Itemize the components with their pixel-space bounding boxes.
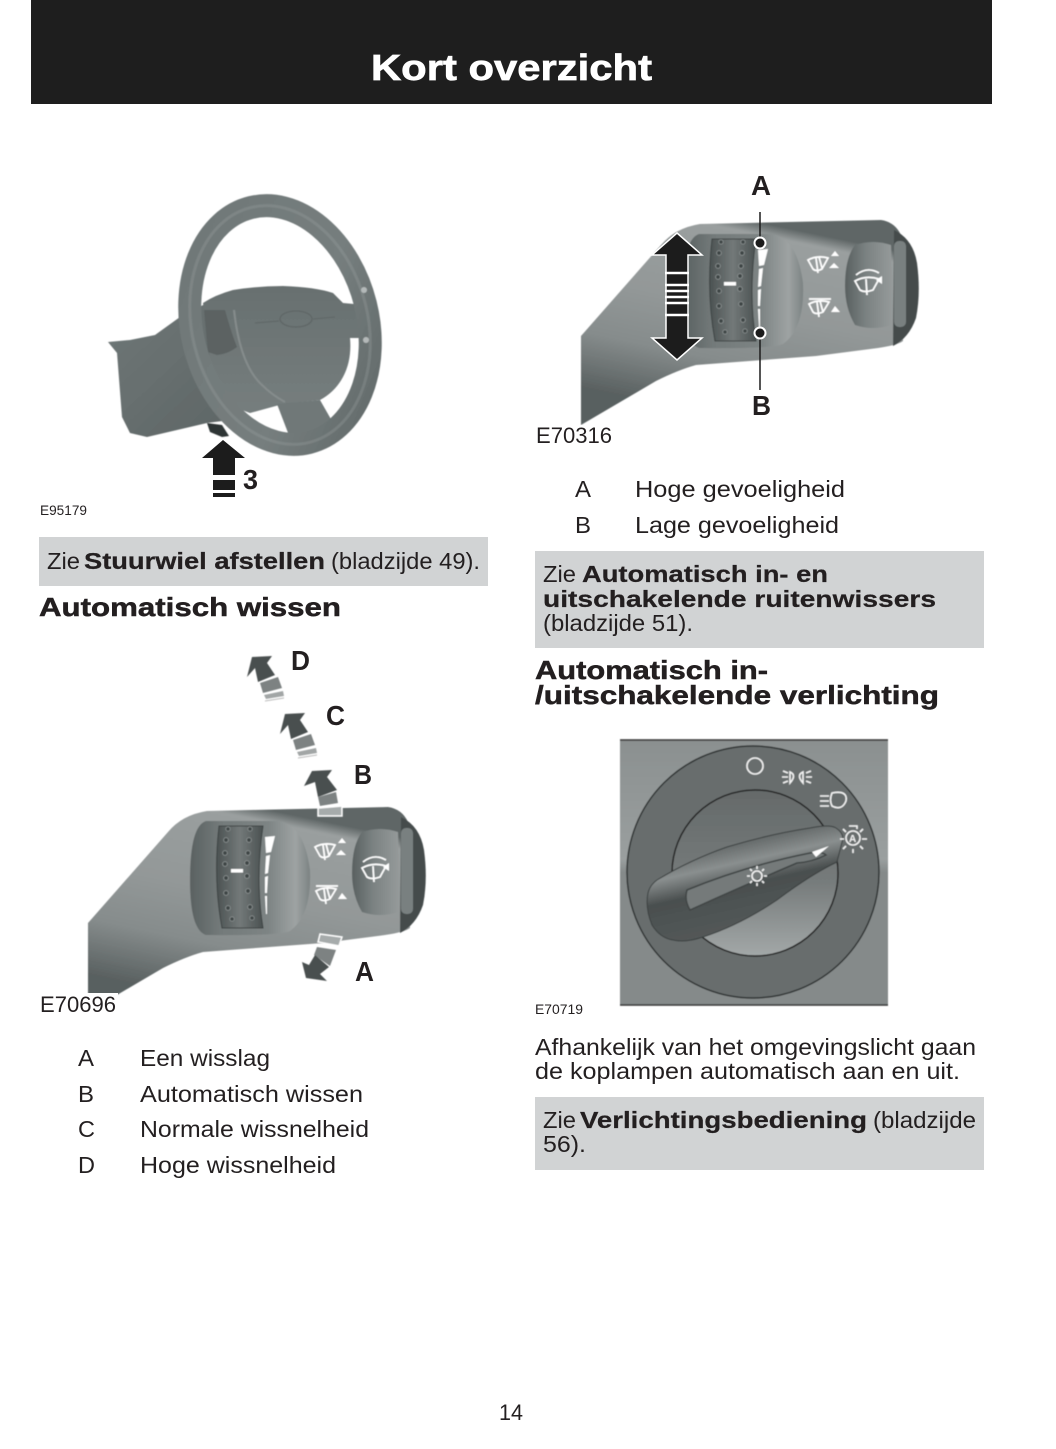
double arrow	[652, 233, 702, 360]
illustration: wiper sensitivity stalk	[581, 170, 919, 425]
note: Stuurwiel afstellen: (bladzijde 49).	[331, 548, 480, 574]
legend: wiper positions: Normale wissnelheid	[140, 1116, 369, 1142]
note: Verlichtingsbediening: Verlichtingsbediening	[580, 1107, 867, 1133]
illustration: wiper stalk with positions A to D: C	[326, 700, 345, 731]
figure code E70696: E70696	[40, 992, 116, 1017]
arrow A	[302, 934, 342, 981]
legend: sensitivity	[575, 476, 845, 538]
figure code E70719: E70719	[535, 1002, 583, 1017]
legend: wiper positions	[78, 1045, 369, 1178]
text: automatic headlamps: de koplampen automatisch aan en uit.	[535, 1058, 960, 1084]
heading: Automatisch in-/uitschakelende verlichting: Automatisch in-	[535, 655, 768, 685]
note: Verlichtingsbediening: (bladzijde	[873, 1107, 976, 1133]
knob	[647, 826, 843, 941]
header bar	[31, 0, 992, 104]
text: automatic headlamps	[535, 1034, 976, 1084]
note: Automatisch in- en uitschakelende ruitenwissers: (bladzijde 51).	[543, 610, 693, 636]
illustration: wiper stalk with positions A to D	[38, 645, 426, 1019]
arrow with label 3	[202, 440, 258, 497]
heading: Automatisch in-/uitschakelende verlichting	[535, 655, 939, 710]
illustration: light switch: A	[849, 834, 856, 845]
legend: sensitivity: Hoge gevoeligheid	[635, 476, 845, 502]
legend: wiper positions: D	[78, 1152, 95, 1178]
note: Automatisch in- en uitschakelende ruitenwissers: Automatisch in- en	[582, 561, 828, 587]
heading: Automatisch wissen: Automatisch wissen	[39, 592, 341, 622]
switch pointer	[812, 846, 829, 857]
switch symbols	[747, 758, 867, 886]
marker A: A	[751, 170, 771, 201]
legend: wiper positions: Hoge wissnelheid	[140, 1152, 336, 1178]
note: Stuurwiel afstellen: Zie	[47, 548, 80, 574]
page number: 14	[499, 1400, 523, 1425]
illustration: light switch	[620, 740, 888, 1005]
note: Verlichtingsbediening	[535, 1097, 984, 1170]
legend: wiper positions: B	[78, 1081, 94, 1107]
text: automatic headlamps: Afhankelijk van het omgevingslicht gaan	[535, 1034, 976, 1060]
legend: sensitivity: B	[575, 512, 591, 538]
note: Automatisch in- en uitschakelende ruitenwissers	[535, 551, 984, 648]
figure code E95179: E95179	[40, 503, 87, 518]
legend: wiper positions: C	[78, 1116, 95, 1142]
marker A	[751, 170, 771, 248]
note: Automatisch in- en uitschakelende ruitenwissers: Zie	[543, 561, 576, 587]
arrow with label 3: 3	[243, 464, 258, 495]
arrow C	[280, 713, 317, 758]
note: Stuurwiel afstellen: Stuurwiel afstellen	[84, 548, 325, 574]
note: Verlichtingsbediening: 56).	[543, 1131, 586, 1157]
illustration: steering wheel	[108, 186, 395, 497]
marker B	[752, 328, 771, 421]
title: Kort overzicht	[371, 47, 652, 88]
marker B: B	[752, 390, 771, 421]
note: Stuurwiel afstellen	[39, 537, 488, 586]
legend: wiper positions: Een wisslag	[140, 1045, 270, 1071]
legend: sensitivity: Lage gevoeligheid	[635, 512, 839, 538]
note: Automatisch in- en uitschakelende ruitenwissers: uitschakelende ruitenwissers	[543, 586, 936, 612]
legend: sensitivity: A	[575, 476, 592, 502]
legend: wiper positions: Automatisch wissen	[140, 1081, 363, 1107]
legend: wiper positions: A	[78, 1045, 95, 1071]
arrow D	[247, 656, 284, 701]
arrow B	[304, 770, 342, 816]
illustration: wiper stalk with positions A to D: A	[355, 956, 374, 987]
heading: Automatisch in-/uitschakelende verlichting: /uitschakelende verlichting	[535, 680, 939, 710]
note: Verlichtingsbediening: Zie	[543, 1107, 576, 1133]
figure code E70316: E70316	[536, 423, 612, 448]
illustration: wiper stalk with positions A to D: B	[354, 759, 372, 790]
illustration: wiper stalk with positions A to D: D	[291, 645, 310, 676]
